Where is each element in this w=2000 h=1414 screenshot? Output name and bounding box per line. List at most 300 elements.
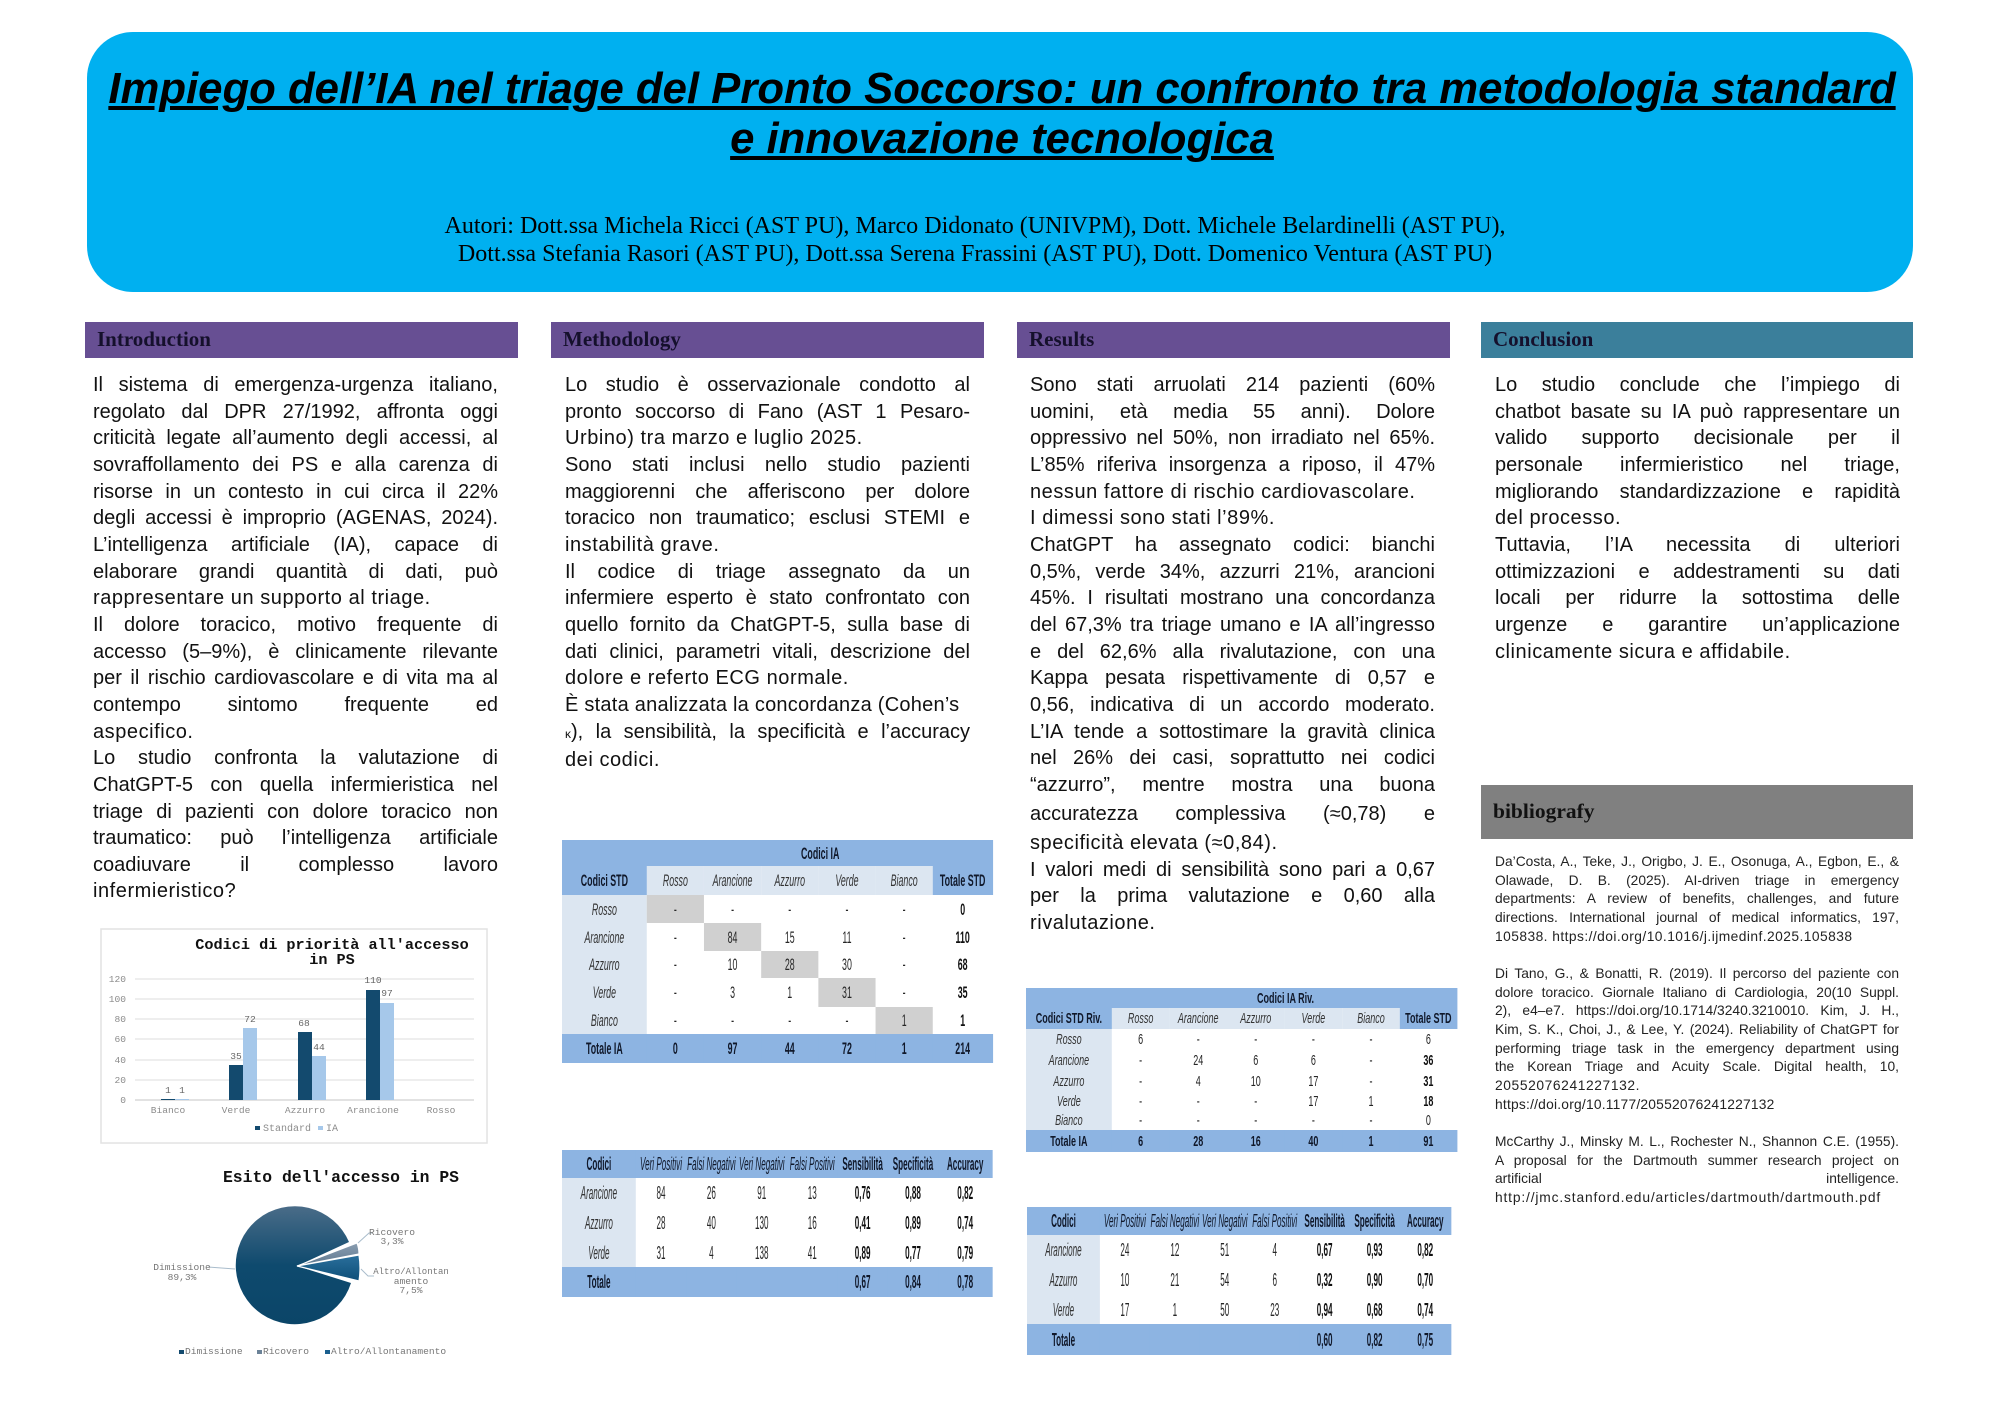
table: codici IA rivalutazione: Totale IA [1050,1132,1088,1150]
table: metriche ingresso: 16 [808,1213,817,1233]
table: codici IA vs STD: 68 [958,955,968,974]
table: metriche ingresso: Arancione [581,1183,617,1203]
bar chart: codici di priorità: 1 [179,1085,185,1096]
text block: methodology [565,374,970,771]
text block: results: del 67,3% tra triage umano e IA all’ingresso [1030,614,1435,636]
text block: results: rivalutazione. [1030,912,1156,934]
table: codici IA vs STD: - [731,1011,734,1030]
table: codici IA rivalutazione: - [1312,1112,1315,1129]
text block: conclusion: chatbot basate su IA può rappresentare un [1495,401,1900,423]
bar chart: codici di priorità: 44 [313,1042,325,1053]
text block: introduction: per il rischio cardiovascolare e di vita ma al [93,667,498,689]
table: codici IA vs STD: Bianco [891,871,918,890]
text block: introduction: triage di pazienti con dolore toracico non [93,800,498,822]
bar chart: codici di priorità: 35 [230,1051,242,1062]
text block: results: ChatGPT ha assegnato codici: bianchi [1030,534,1435,556]
table: codici IA vs STD: - [674,983,677,1002]
table: codici IA rivalutazione: 6 [1311,1052,1316,1069]
table: codici IA vs STD: Azzurro [589,955,620,974]
table: metriche ingresso: 0,41 [855,1213,870,1233]
table: codici IA rivalutazione: Codici STD Riv. [1036,1010,1102,1027]
table: metriche rivalutazione: 0,74 [1417,1300,1433,1320]
table: metriche rivalutazione: Veri Negativi [1202,1211,1248,1231]
table: codici IA vs STD: 1 [787,983,792,1002]
table: codici IA rivalutazione: - [1197,1112,1200,1129]
table: metriche rivalutazione: Falsi Negativi [1151,1211,1199,1231]
heading: Conclusion: Conclusion [1493,327,1593,351]
table: metriche ingresso: Specificità [893,1154,933,1174]
pie chart: esito dell'accesso: Ricovero [369,1227,415,1238]
table: codici IA vs STD: 10 [728,955,737,974]
table: metriche rivalutazione: 23 [1270,1300,1279,1320]
table: metriche rivalutazione: 0,75 [1417,1330,1433,1350]
table: metriche ingresso: 0,82 [957,1183,973,1203]
table: codici IA rivalutazione: 10 [1251,1072,1261,1090]
bar chart: codici di priorità: 80 [114,1014,126,1025]
table: metriche rivalutazione: Azzurro [1049,1270,1077,1290]
table: codici IA rivalutazione: 17 [1308,1092,1318,1110]
table: codici IA rivalutazione: - [1370,1052,1372,1069]
table: codici IA rivalutazione: - [1370,1072,1372,1090]
table: codici IA rivalutazione: Arancione [1178,1010,1218,1027]
table: codici IA rivalutazione: Verde [1302,1010,1325,1027]
text block: results: Kappa pesata rispettivamente di 0,57 e [1030,667,1435,689]
text block: bibliography: McCarthy J., Minsky M. L., Rochester N., Shannon C.E. (1955). [1495,1134,1899,1149]
table: codici IA vs STD: - [903,983,906,1002]
table: metriche ingresso: Verde [588,1242,610,1262]
table: metriche ingresso: 130 [755,1213,769,1233]
table: codici IA rivalutazione: - [1312,1031,1315,1048]
table: codici IA vs STD: Rosso [592,900,617,918]
table: metriche rivalutazione: 54 [1220,1270,1229,1290]
table: metriche rivalutazione: Sensibilità [1304,1211,1345,1231]
text block: results: 0,56, indicativa di un accordo moderato. [1030,694,1435,716]
text block: bibliography: A proposal for the Dartmouth summer research project on [1495,1153,1899,1168]
text block: methodology: κ), la sensibilità, la specificità e l’accuracy [565,721,970,743]
table: codici IA vs STD: 1 [960,1011,965,1030]
text block: bibliography: 20552076241227132. [1495,1078,1640,1093]
table: codici IA vs STD: 0 [960,900,965,918]
text block: bibliography: performing triage task in the emergency department using [1495,1041,1899,1056]
table: codici IA vs STD: Codici STD [581,871,628,890]
text block: introduction: aspecifico. [93,721,194,743]
table: metriche ingresso: Veri Negativi [739,1154,785,1174]
table: codici IA vs STD: 31 [842,983,852,1002]
pie chart: esito dell'accesso: Ricovero [263,1346,309,1357]
heading: Introduction [85,322,518,358]
text block: conclusion: clinicamente sicura e affidabile. [1495,641,1791,663]
text block: methodology: pronto soccorso di Fano (AST 1 Pesaro- [565,401,970,423]
table: codici IA vs STD: 1 [902,1039,907,1058]
table: codici IA rivalutazione: - [1254,1031,1257,1048]
table: metriche ingresso: Accuracy [947,1154,983,1174]
table: codici IA rivalutazione: Bianco [1357,1010,1385,1027]
table: metriche ingresso: 31 [656,1242,666,1262]
pie chart: esito dell'accesso: Dimissione [185,1346,243,1357]
table: codici IA rivalutazione: - [1254,1092,1257,1110]
table: codici IA rivalutazione: - [1370,1112,1372,1129]
table: codici IA vs STD: 15 [785,928,795,946]
text block: methodology: Lo studio è osservazionale condotto al [565,374,970,396]
table: metriche ingresso: 84 [656,1183,666,1203]
text block: results: specificità elevata (≈0,84). [1030,832,1278,854]
table: metriche rivalutazione: 51 [1220,1240,1229,1260]
table: codici IA vs STD: 97 [728,1039,737,1058]
bar chart: codici di priorità: 0 [120,1095,126,1106]
table: codici IA rivalutazione: 6 [1253,1052,1258,1069]
table: codici IA vs STD: - [731,900,734,918]
table: metriche rivalutazione: Specificità [1354,1211,1395,1231]
table: codici IA rivalutazione: Azzurro [1053,1072,1084,1090]
table: codici IA vs STD: - [788,900,791,918]
table: metriche ingresso: Falsi Positivi [790,1154,835,1174]
table: codici IA rivalutazione: Verde [1057,1092,1081,1110]
table: metriche rivalutazione: Codici [1051,1211,1076,1231]
text block: results: L’IA tende a sottostimare la gravità clinica [1030,721,1435,743]
table: metriche ingresso: Veri Positivi [640,1154,682,1174]
text block: introduction [93,374,498,902]
table: metriche ingresso: 0,74 [957,1213,973,1233]
text block: introduction: Il sistema di emergenza-urgenza italiano, [93,374,498,396]
table: metriche ingresso: Sensibilità [842,1154,883,1174]
text block: introduction: infermieristico? [93,880,236,902]
pie chart: esito dell'accesso: 7,5% [399,1285,423,1296]
text block: introduction: rappresentare un supporto al triage. [93,587,431,609]
pie chart: esito dell'accesso: 3,3% [380,1236,404,1247]
table: codici IA rivalutazione: 18 [1423,1092,1433,1110]
text block: conclusion: locali per ridurre la sottostima delle [1495,587,1900,609]
table: metriche ingresso: 28 [656,1213,666,1233]
table: metriche ingresso: 0,77 [905,1242,921,1262]
table: codici IA rivalutazione: 6 [1138,1132,1143,1150]
table: codici IA rivalutazione: 36 [1423,1052,1433,1069]
table: metriche rivalutazione: 21 [1170,1270,1179,1290]
table: metriche ingresso: 138 [755,1242,769,1262]
table: metriche rivalutazione: 6 [1272,1270,1277,1290]
table: metriche ingresso: 40 [707,1213,716,1233]
table: codici IA vs STD: Arancione [713,871,752,890]
heading: Results: Results [1029,327,1094,351]
table: metriche ingresso: 41 [808,1242,817,1262]
table: metriche ingresso: 0,67 [855,1272,870,1292]
table: metriche ingresso: 0,89 [855,1242,870,1262]
table: metriche ingresso: Totale [587,1272,611,1292]
heading: bibliography [1481,785,1913,839]
text block: methodology: dei codici. [565,749,660,771]
table: codici IA vs STD: 11 [842,928,852,946]
text block: results: e del 62,6% alla rivalutazione, con una [1030,641,1435,663]
table: codici IA vs STD: - [674,928,677,946]
table: codici IA vs STD: 44 [785,1039,795,1058]
text block: bibliography: directions. International journal of medical informatics, 197, [1495,910,1899,925]
table: metriche rivalutazione: 24 [1120,1240,1129,1260]
table: metriche ingresso: 0,79 [957,1242,973,1262]
table: metriche rivalutazione: 0,67 [1317,1240,1333,1260]
heading: Introduction: Introduction [97,327,211,351]
table: metriche ingresso: Codici [587,1154,611,1174]
table: metriche rivalutazione: 12 [1170,1240,1179,1260]
text block: results: accuratezza complessiva (≈0,78) e [1030,803,1435,825]
table: codici IA vs STD: - [845,900,848,918]
text block: conclusion: del processo. [1495,507,1621,529]
table: metriche ingresso: 91 [757,1183,766,1203]
table: metriche rivalutazione: 17 [1120,1300,1129,1320]
table: codici IA vs STD: - [903,955,906,974]
table: codici IA vs STD: - [845,1011,848,1030]
table: codici IA vs STD: Rosso [663,871,688,890]
table: codici IA rivalutazione: Rosso [1128,1010,1153,1027]
table: metriche rivalutazione: 0,93 [1367,1240,1383,1260]
bar chart: codici di priorità: 60 [114,1034,126,1045]
text block: results: 45%. I risultati mostrano una concordanza [1030,587,1435,609]
text block: conclusion: personale infermieristico nel triage, [1495,454,1900,476]
heading: Methodology: Methodology [563,327,681,351]
pie chart: esito dell'accesso: Esito dell'accesso in PS [223,1168,459,1187]
table: metriche ingresso: Azzurro [585,1213,613,1233]
pie chart: esito dell'accesso: Altro/Allontan [373,1267,449,1277]
text block: bibliography: http://jmc.stanford.edu/articles/dartmouth/dartmouth.pdf [1495,1190,1881,1205]
text block: introduction: contempo sintomo frequente ed [93,694,498,716]
text block: bibliography: departments: A review of benefits, challenges, and future [1495,891,1899,906]
table: codici IA rivalutazione: 0 [1426,1112,1431,1129]
text block: bibliography: Olawade, D. B. (2025). AI-driven triage in emergency [1495,873,1899,888]
table: metriche ingresso: 0,89 [905,1213,921,1233]
text block: bibliography: the Korean Triage and Acuity Scale. Digital health, 10, [1495,1059,1899,1074]
text block: conclusion: ottimizzazioni e addestramenti su dati [1495,561,1900,583]
table: codici IA rivalutazione: 6 [1426,1031,1431,1048]
bar chart: codici di priorità: 20 [114,1075,126,1086]
table: metriche ingresso [562,1150,993,1297]
text block: methodology: Urbino) tra marzo e luglio 2025. [565,427,863,449]
text block: bibliography: 2), e4–e7. https://doi.org/10.1714/3240.3210010. Kim, J. H., [1495,1003,1899,1018]
bar chart: codici di priorità: Standard [263,1123,311,1135]
table: codici IA vs STD: Verde [835,871,859,890]
table: codici IA rivalutazione: 6 [1138,1031,1143,1048]
table: codici IA vs STD: - [903,900,906,918]
table: codici IA vs STD: 72 [842,1039,852,1058]
bar chart: codici di priorità: Bianco [151,1105,186,1116]
table: codici IA rivalutazione: - [1370,1031,1372,1048]
table: codici IA vs STD: Azzurro [775,871,805,890]
table: metriche ingresso: 0,84 [905,1272,921,1292]
table: metriche rivalutazione: 1 [1173,1300,1177,1320]
table: codici IA vs STD: 35 [958,983,968,1002]
bar chart: codici di priorità: Azzurro [285,1105,325,1116]
text block: methodology: instabilità grave. [565,534,719,556]
table: codici IA rivalutazione: 17 [1308,1072,1318,1090]
pie chart: esito dell'accesso: Dimissione [153,1262,211,1273]
title [108,64,1896,163]
table: metriche rivalutazione: 4 [1272,1240,1277,1260]
text block: bibliography: Kim, S. K., Choi, J., & Lee, Y. (2024). Reliability of ChatGPT for [1495,1022,1899,1037]
text block: introduction: sovraffollamento dei PS e alla carenza di [93,454,498,476]
text block: bibliography: dolore toracico. Giornale Italiano di Cardiologia, 20(10 Suppl. [1495,985,1899,1000]
table: metriche ingresso: 13 [808,1183,817,1203]
table: metriche ingresso: 4 [709,1242,714,1262]
bar chart: codici di priorità: 100 [109,994,126,1005]
table: codici IA rivalutazione: - [1197,1031,1200,1048]
table: codici IA vs STD: Totale STD [940,871,985,890]
text block: results: per la prima valutazione e 0,60 alla [1030,885,1435,907]
bar chart: codici di priorità: Codici di priorità all'accesso [195,936,469,954]
text block: results: 0,5%, verde 34%, azzurri 21%, arancioni [1030,561,1435,583]
table: codici IA vs STD: - [788,1011,791,1030]
text block: methodology: È stata analizzata la concordanza (Cohen’s [565,694,959,716]
table: metriche ingresso: Falsi Negativi [687,1154,736,1174]
text block: results: oppressivo nel 50%, non irradiato nel 65%. [1030,427,1435,449]
authors: Autori: Dott.ssa Michela Ricci (AST PU), Marco Didonato (UNIVPM), Dott. Michele Belardinelli (AST PU), [444,213,1506,239]
text block: results: I dimessi sono stati l’89%. [1030,507,1275,529]
table: codici IA vs STD [562,840,994,1063]
table: codici IA rivalutazione: - [1139,1052,1142,1069]
table: metriche rivalutazione: Falsi Positivi [1252,1211,1297,1231]
bar chart: codici di priorità: Rosso [427,1105,456,1116]
text block: introduction: Lo studio confronta la valutazione di [93,747,498,769]
text block: methodology: quello fornito da ChatGPT-5, sulla base di [565,614,970,636]
table: codici IA rivalutazione: Azzurro [1240,1010,1271,1027]
text block: introduction: elaborare grandi quantità di dati, può [93,561,498,583]
text block: introduction: degli accessi è improprio (AGENAS, 2024). [93,507,498,529]
table: codici IA vs STD: 0 [673,1039,678,1058]
bar chart: codici di priorità: 97 [381,988,393,999]
table: codici IA rivalutazione: 1 [1368,1092,1374,1110]
table: codici IA rivalutazione [1026,988,1458,1152]
authors: Dott.ssa Stefania Rasori (AST PU), Dott.ssa Serena Frassini (AST PU), Dott. Domenico Ventura (AST PU) [458,241,1492,267]
heading: Results [1017,322,1450,358]
text block: introduction: ChatGPT-5 con quella infermieristica nel [93,774,498,796]
text block: bibliography: Da’Costa, A., Teke, J., Origbo, J. E., Osonuga, A., Egbon, E., & [1495,854,1899,869]
table: codici IA rivalutazione: Rosso [1056,1031,1082,1048]
text block: methodology: Il codice di triage assegnato da un [565,561,970,583]
table: codici IA rivalutazione: - [1139,1092,1142,1110]
table: codici IA rivalutazione: 40 [1308,1132,1318,1150]
text block: methodology: maggiorenni che afferiscono per dolore [565,481,970,503]
table: metriche ingresso: 0,78 [957,1272,973,1292]
authors [444,213,1506,267]
text block: results: L’85% riferiva insorgenza a riposo, il 47% [1030,454,1435,476]
table: codici IA vs STD: Arancione [584,928,624,946]
title banner [87,32,1913,292]
table: codici IA vs STD: 1 [902,1011,907,1030]
text block: introduction: accesso (5–9%), è clinicamente rilevante [93,641,498,663]
heading: Conclusion [1481,322,1913,358]
table: metriche rivalutazione: 0,60 [1317,1330,1333,1350]
table: metriche rivalutazione: 0,94 [1317,1300,1333,1320]
text block: introduction: traumatico: può l’intelligenza artificiale [93,827,498,849]
text block: results: “azzurro”, mentre mostra una buona [1030,774,1435,796]
table: codici IA vs STD: - [674,1011,677,1030]
bar chart: codici di priorità: 110 [364,975,382,986]
bar chart: codici di priorità: 72 [244,1014,256,1025]
table: codici IA rivalutazione: Bianco [1055,1112,1083,1129]
heading: bibliography: bibliografy [1493,799,1595,823]
text block: introduction: Il dolore toracico, motivo frequente di [93,614,498,636]
text block: methodology: infermiere esperto è stato confrontato con [565,587,970,609]
table: metriche rivalutazione: Arancione [1045,1240,1082,1260]
table: metriche rivalutazione: Totale [1052,1330,1075,1350]
pie chart: esito dell'accesso: amento [394,1276,429,1287]
bar chart: codici di priorità: in PS [309,951,355,969]
table: codici IA vs STD: 28 [785,955,795,974]
text block: conclusion: Lo studio conclude che l’impiego di [1495,374,1900,396]
table: metriche rivalutazione: Veri Positivi [1104,1211,1146,1231]
bar chart: codici di priorità: 120 [109,974,126,985]
text block: conclusion [1495,374,1900,663]
table: codici IA vs STD: Codici IA [801,844,839,862]
table: codici IA vs STD: Bianco [591,1011,618,1030]
text block: methodology: dati clinici, parametri vitali, descrizione del [565,641,970,663]
table: metriche ingresso: 26 [707,1183,716,1203]
text block: bibliography: 105838. https://doi.org/10.1016/j.ijmedinf.2025.105838 [1495,929,1852,944]
text block: results: nel 26% dei casi, soprattutto nei codici [1030,747,1435,769]
table: codici IA rivalutazione: Totale STD [1405,1010,1451,1027]
bar chart: codici di priorità: 40 [114,1055,126,1066]
table: metriche rivalutazione: 50 [1220,1300,1229,1320]
text block: results [1030,374,1435,934]
table: codici IA rivalutazione: - [1254,1112,1257,1129]
pie chart: esito dell'accesso: 89,3% [168,1272,197,1283]
title: e innovazione tecnologica [730,114,1274,163]
text block: conclusion: Tuttavia, l’IA necessita di ulteriori [1495,534,1900,556]
table: metriche rivalutazione [1027,1207,1452,1355]
table: codici IA rivalutazione: 31 [1423,1072,1433,1090]
text block: bibliography [1495,854,1899,1205]
bar chart: codici di priorità: IA [326,1124,338,1135]
table: codici IA vs STD: 30 [842,955,852,974]
bar chart: codici di priorità: Verde [222,1105,251,1116]
table: codici IA vs STD: - [674,900,677,918]
text block: introduction: criticità legate all’aumento degli accessi, al [93,427,498,449]
text block: conclusion: migliorando standardizzazione e rapidità [1495,481,1900,503]
bar chart: codici di priorità: 68 [298,1018,310,1029]
text block: results: Sono stati arruolati 214 pazienti (60% [1030,374,1435,396]
table: codici IA rivalutazione: 91 [1423,1132,1433,1150]
table: codici IA rivalutazione: - [1197,1092,1200,1110]
table: metriche rivalutazione: 0,70 [1417,1270,1433,1290]
table: codici IA rivalutazione: 24 [1193,1052,1203,1069]
heading: Methodology [551,322,984,358]
pie chart: esito dell'accesso: Altro/Allontanamento [331,1346,446,1357]
table: codici IA vs STD: 84 [728,928,737,946]
bar chart: codici di priorità: Arancione [347,1105,399,1116]
table: codici IA rivalutazione: Arancione [1049,1052,1089,1069]
table: metriche rivalutazione: 0,82 [1417,1240,1433,1260]
table: codici IA rivalutazione: 4 [1196,1072,1201,1090]
table: codici IA rivalutazione: - [1139,1072,1142,1090]
text block: introduction: coadiuvare il complesso lavoro [93,854,498,876]
table: codici IA rivalutazione: 28 [1193,1132,1203,1150]
text block: conclusion: valido supporto decisionale per il [1495,427,1900,449]
table: codici IA vs STD: 3 [730,983,735,1002]
table: codici IA vs STD: Verde [593,983,616,1002]
table: codici IA rivalutazione: - [1139,1112,1142,1129]
text block: introduction: L’intelligenza artificiale (IA), capace di [93,534,498,556]
text block: results: I valori medi di sensibilità sono pari a 0,67 [1030,859,1435,881]
title: Impiego dell’IA nel triage del Pronto Soccorso: un confronto tra metodologia standard [108,64,1896,113]
table: metriche rivalutazione: 10 [1120,1270,1129,1290]
text block: methodology: dolore e referto ECG normale. [565,667,849,689]
table: codici IA vs STD: Totale IA [586,1039,623,1058]
text block: bibliography: https://doi.org/10.1177/20552076241227132 [1495,1097,1775,1112]
table: codici IA rivalutazione: 1 [1368,1132,1374,1150]
text block: bibliography: Di Tano, G., & Bonatti, R. (2019). Il percorso del paziente con [1495,966,1899,981]
text block: methodology: Sono stati inclusi nello studio pazienti [565,454,970,476]
table: metriche rivalutazione: 0,90 [1367,1270,1383,1290]
table: codici IA vs STD: 110 [956,928,970,946]
table: metriche rivalutazione: Accuracy [1407,1211,1443,1231]
table: codici IA vs STD: - [903,928,906,946]
text block: results: uomini, età media 55 anni). Dolore [1030,401,1435,423]
